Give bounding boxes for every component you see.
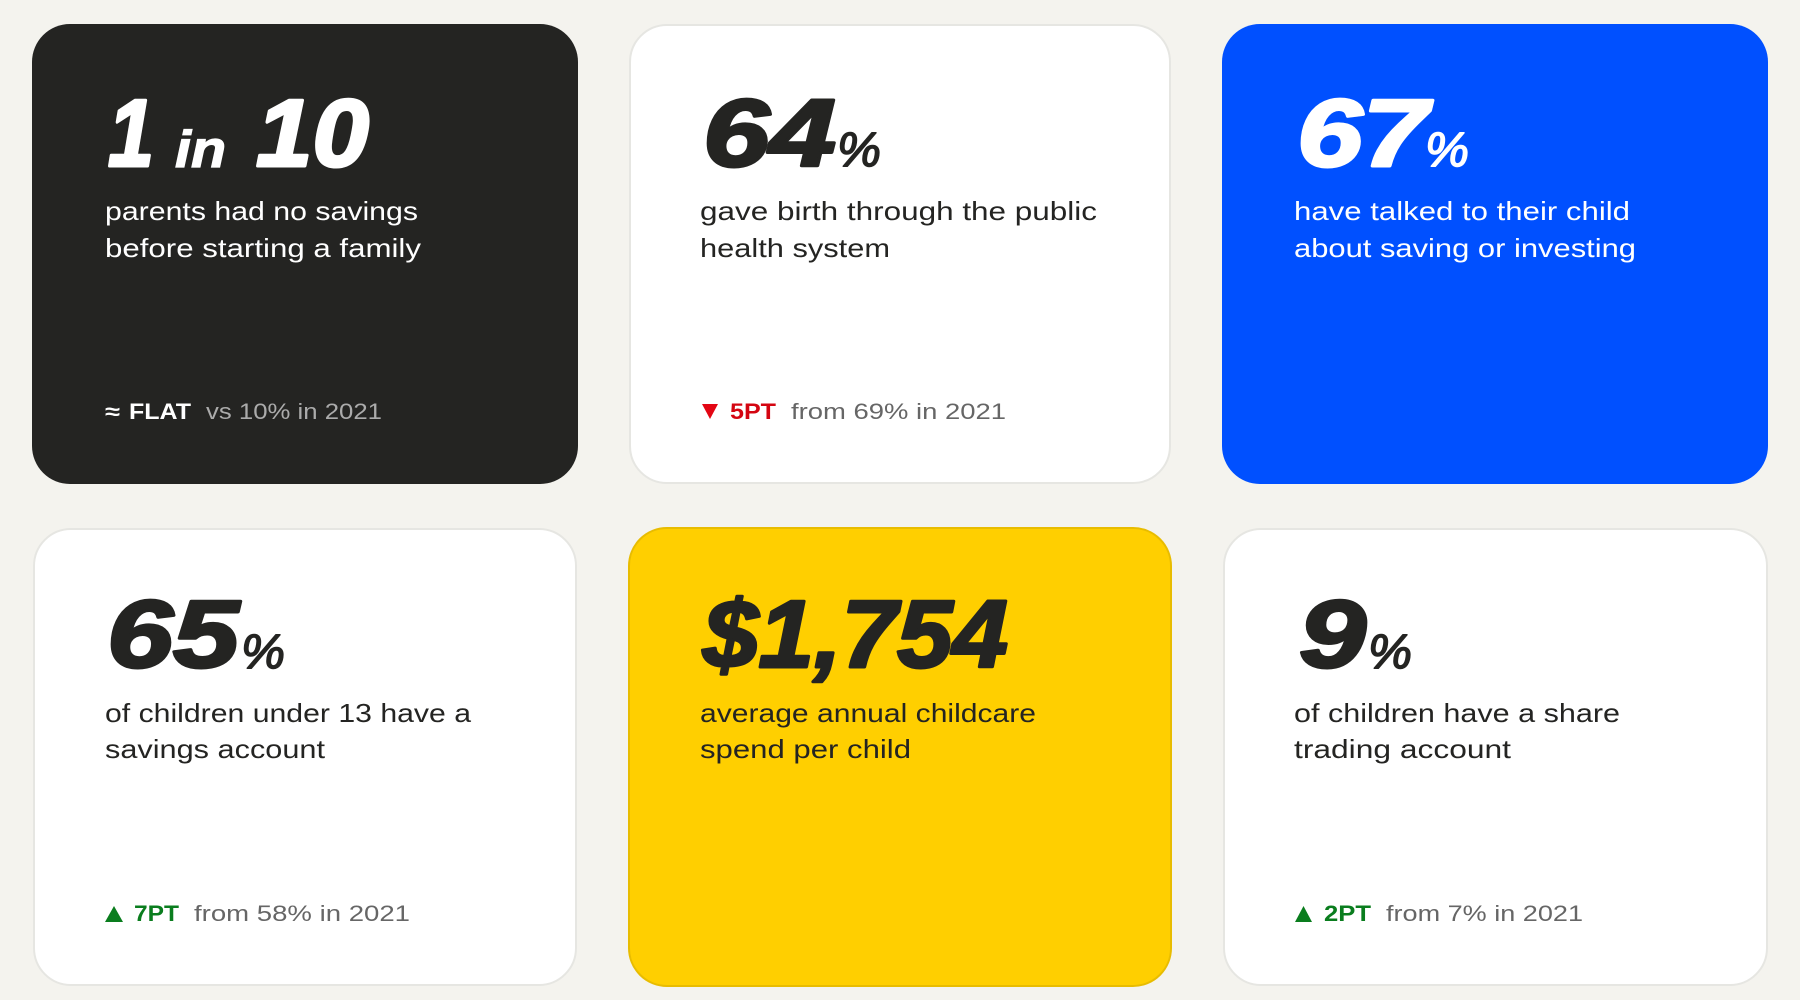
description: savings account <box>105 734 326 764</box>
description <box>1294 196 1636 263</box>
trend: down 5pt: from 69% in 2021 <box>791 399 1006 424</box>
panel: 1 in 10 parents no savings <box>32 24 578 484</box>
icon: up triangle <box>105 906 123 922</box>
trend: up 7pt: 7PT <box>134 901 180 926</box>
stat: 65% <box>107 581 285 688</box>
icon: up triangle <box>1295 906 1312 922</box>
panel: 64% public health system <box>630 25 1170 483</box>
stat: 67%: 67 <box>1297 80 1434 187</box>
stat: 64%: % <box>837 124 881 177</box>
card background: yellow <box>629 528 1171 986</box>
description <box>1294 698 1620 764</box>
card background: white <box>34 529 576 985</box>
stat: 67%: % <box>1425 124 1469 177</box>
description: about saving or investing <box>1294 233 1636 263</box>
trend: up 2pt: 2PT <box>1324 901 1372 926</box>
description <box>700 698 1036 764</box>
panel: 67% talked to child <box>1222 24 1768 484</box>
trend: down 5pt: 5PT <box>730 399 777 424</box>
stat: 65%: 65 <box>107 581 241 688</box>
description: of children have a share <box>1294 698 1620 728</box>
stat: 1 in 10: in <box>175 121 226 179</box>
description: trading account <box>1294 734 1512 764</box>
description: parents had no savings <box>105 196 418 226</box>
trend: flat: ≈ <box>105 399 120 424</box>
trend: up 2pt <box>1295 901 1583 926</box>
trend: flat: FLAT <box>129 399 192 424</box>
trend: up 2pt: from 7% in 2021 <box>1386 901 1583 926</box>
stat: 67% <box>1297 80 1469 187</box>
card background: blue <box>1222 24 1768 484</box>
panel: 65% savings account <box>34 529 576 985</box>
stat: $1,754: $1,754 <box>702 581 1008 688</box>
description <box>105 698 472 764</box>
stat: 1 in 10 <box>108 80 369 187</box>
description: gave birth through the public <box>700 196 1097 226</box>
stat: 9% <box>1299 581 1412 688</box>
description: before starting a family <box>105 233 421 263</box>
description: spend per child <box>700 734 911 764</box>
panel: $1,754 childcare spend <box>629 528 1171 986</box>
stat: 65%: % <box>241 626 285 679</box>
panel: 9% share trading account <box>1224 529 1767 985</box>
card background: dark <box>32 24 578 484</box>
description: health system <box>700 233 890 263</box>
trend: up 7pt <box>105 901 410 926</box>
description <box>700 196 1097 263</box>
trend: flat <box>105 399 382 424</box>
stat: 9%: % <box>1368 626 1412 679</box>
stat: 64%: 64 <box>703 80 836 187</box>
card background: white <box>630 25 1170 483</box>
icon: down triangle <box>702 404 718 419</box>
trend: flat: vs 10% in 2021 <box>206 399 382 424</box>
trend: down 5pt <box>702 399 1006 424</box>
stat: 1 in 10: 1 <box>108 80 154 187</box>
description: have talked to their child <box>1294 196 1630 226</box>
stat: 9%: 9 <box>1299 581 1366 688</box>
trend: up 7pt: from 58% in 2021 <box>194 901 410 926</box>
stat: 64% <box>703 80 881 187</box>
description <box>105 196 421 263</box>
stat: 1 in 10: 10 <box>256 80 369 187</box>
description: average annual childcare <box>700 698 1036 728</box>
description: of children under 13 have a <box>105 698 472 728</box>
card background: white <box>1224 529 1767 985</box>
